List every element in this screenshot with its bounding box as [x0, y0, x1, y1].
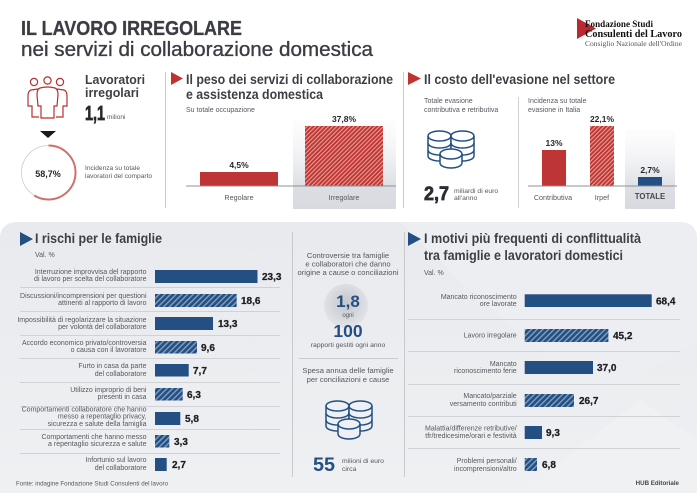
row: discussioni 18,6: 18,6 [241, 296, 261, 307]
text: spesa annua [302, 366, 394, 384]
row: comportamenti collaboratore 5,8: 5,8 [185, 414, 199, 425]
number: 1,1 milioni: 1,1 [85, 103, 105, 125]
row: comportamenti collaboratore 5,8: Comportamenti collaboratore che hanno [22, 406, 147, 414]
stat circle: 1,8 ogni 100: 1,8 [336, 292, 360, 311]
row: mancato riconoscimento ferie 37,0: riconoscimento ferie [454, 368, 517, 375]
row: accordo 9,6: Accordo economico privato/controversia [22, 340, 147, 347]
panel: controversie e spesa [298, 251, 399, 476]
text: spesa annua: per conciliazioni e cause [307, 375, 389, 384]
row: accordo 9,6 [22, 340, 215, 354]
row: comportamenti 3,3 [41, 434, 188, 448]
row: utilizzo 6,3: 6,3 [187, 390, 201, 401]
row: infortunio 2,7: 2,7 [172, 460, 186, 471]
text: totale evasione [424, 98, 498, 114]
highlight: irregolare column [293, 120, 396, 209]
row: interruzione 23,3: di lavoro per scelta del collaboratore [34, 276, 147, 283]
heading: lavoratori irregolari: Lavoratori [85, 73, 145, 87]
heading: il peso dei servizi [186, 71, 393, 102]
unit label: Val. % [35, 252, 55, 259]
row: problemi personali 6,8 [454, 458, 556, 473]
row: malattia 9,3: tfr/tredicesime/orari e festività [425, 433, 517, 440]
heading: i motivi [424, 230, 641, 263]
text: incidenza [85, 165, 152, 180]
row: infortunio 2,7: del collaboratore [95, 465, 147, 472]
highlight: totale column [625, 130, 675, 209]
logo: Fondazione Studi: Consulenti del Lavoro [585, 29, 682, 40]
row: impossibilità 13,3: per volontà del collaboratore [58, 324, 147, 331]
row: accordo 9,6: 9,6 [201, 343, 215, 354]
row: discussioni 18,6 [20, 293, 261, 307]
row: furto 7,7 [78, 363, 207, 378]
number: 1,1 milioni: milioni [107, 114, 125, 121]
source note: Fonte: indagine Fondazione Studi Consulenti del lavoro [16, 480, 169, 488]
row: utilizzo 6,3: presenti in casa [97, 394, 147, 401]
heading: i rischi: I rischi per le famiglie [35, 230, 162, 246]
number: 55 milioni: circa [342, 466, 357, 473]
row: infortunio 2,7: Infortunio sul lavoro [85, 457, 147, 464]
bar: regolare: Regolare [224, 193, 254, 202]
unit label: Val. % [424, 270, 444, 277]
text: incidenza su totale evasione: evasione in Italia [528, 107, 580, 114]
row: discussioni 18,6: Discussioni/incomprensioni per questioni [20, 293, 147, 300]
icon: database coins [428, 131, 474, 168]
bar: irregolare [305, 114, 383, 202]
stat circle: 1,8 ogni 100 [311, 284, 385, 349]
icon: blue arrow [20, 232, 33, 246]
row: impossibilità 13,3 [17, 317, 238, 331]
text: incidenza: lavoratori del comparto [85, 173, 152, 180]
heading: il peso dei servizi: e assistenza domestica [186, 86, 323, 102]
row: malattia 9,3: Malattia/differenze retributive/ [425, 426, 517, 432]
row: mancato riconoscimento ore 68,4: 68,4 [656, 296, 676, 308]
stat circle: 1,8 ogni 100: 100 [333, 321, 363, 341]
text: totale evasione: contributiva e retributiva [424, 107, 498, 114]
panel: lavoratori irregolari [22, 73, 152, 200]
text: totale evasione: Totale evasione [424, 98, 473, 105]
row: comportamenti 3,3: a repentaglio sicurezza e salute [48, 441, 147, 448]
bar: irpef [590, 114, 614, 202]
row: utilizzo 6,3 [70, 387, 201, 401]
icon: blue arrow [408, 232, 421, 246]
text: spesa annua: Spesa annua delle famiglie [302, 366, 394, 375]
text: controversie [298, 251, 399, 277]
row: problemi personali 6,8: Problemi personali/ [457, 458, 517, 465]
row: accordo 9,6: o causa con il lavoratore [71, 347, 147, 354]
row: problemi personali 6,8: incomprensioni/altro [454, 466, 517, 473]
row: problemi personali 6,8: 6,8 [542, 460, 556, 471]
bar: contributiva: 13% [545, 138, 563, 148]
row: impossibilità 13,3: Impossibilità di regolarizzare la situazione [17, 317, 147, 324]
row: furto 7,7: Furto in casa da parte [78, 363, 147, 370]
row: mancato riconoscimento ore 68,4: Mancato riconoscimento [441, 294, 517, 301]
bar: contributiva: Contributiva [534, 193, 572, 202]
title: nei servizi di collaborazione domestica [21, 39, 374, 61]
row: utilizzo 6,3: Utilizzo improprio di beni [70, 387, 147, 394]
row: discussioni 18,6: attinenti al rapporto di lavoro [58, 300, 147, 307]
panel: il costo dell'evasione [408, 71, 677, 209]
text: incidenza su totale evasione [528, 98, 586, 114]
number: 55 milioni: 55 [313, 455, 335, 476]
row: mancato riconoscimento ferie 37,0: Mancato [490, 361, 517, 368]
icon: three workers [28, 77, 67, 118]
text: controversie: e collaboratori che danno [305, 260, 391, 268]
row: infortunio 2,7 [85, 457, 186, 472]
row: comportamenti 3,3: Comportamenti che hanno messo [41, 434, 147, 441]
stat circle: 1,8 ogni 100: ogni [342, 313, 354, 319]
text: controversie: Controversie tra famiglie [307, 251, 389, 260]
bar: totale [635, 165, 665, 201]
bar: irregolare: Irregolare [329, 193, 359, 202]
row: lavoro irregolare 45,2 [464, 329, 633, 342]
row: furto 7,7: del collaboratore [95, 371, 147, 378]
number: 2,7 miliardi: all'anno [454, 195, 477, 202]
logo: Fondazione Studi [577, 18, 683, 48]
row: mancato riconoscimento ferie 37,0: 37,0 [597, 363, 617, 374]
icon: database coins [326, 401, 372, 439]
panel: i motivi di conflittualità [408, 230, 680, 487]
panel: i rischi per le famiglie [16, 230, 282, 488]
row: versamento contributi 26,7 [450, 393, 599, 408]
text: controversie: origine a cause o conciliazioni [298, 268, 399, 277]
row: comportamenti collaboratore 5,8: sicurezza e salute della famiglia [48, 421, 147, 428]
number: 2,7 miliardi: 2,7 [424, 184, 449, 205]
icon: arrow down [40, 131, 56, 138]
heading: lavoratori irregolari: irregolari [85, 86, 139, 100]
row: lavoro irregolare 45,2: 45,2 [613, 331, 633, 342]
heading: lavoratori irregolari [85, 73, 145, 100]
row: malattia 9,3 [425, 426, 560, 440]
logo: Fondazione Studi: Consiglio Nazionale dell'Ordine [585, 39, 683, 48]
row: comportamenti collaboratore 5,8: messo a repentaglio privacy, [58, 414, 147, 420]
credit: HUB Editoriale [636, 480, 680, 487]
donut chart: 58,7%: 58,7% [35, 169, 61, 179]
number: 2,7 miliardi: miliardi di euro [454, 188, 498, 195]
row: malattia 9,3: 9,3 [546, 428, 560, 439]
number: 55 milioni: milioni di euro [342, 458, 384, 465]
heading: i motivi: tra famiglie e lavoratori domestici [424, 247, 623, 263]
icon: red arrow [408, 72, 421, 85]
row: comportamenti collaboratore 5,8 [22, 406, 199, 428]
bar: regolare: 4,5% [229, 160, 249, 170]
row: furto 7,7: 7,7 [193, 366, 207, 377]
number: 55 milioni [313, 455, 384, 476]
title: IL LAVORO IRREGOLARE [21, 18, 242, 40]
title [21, 18, 374, 61]
row: impossibilità 13,3: 13,3 [218, 319, 238, 330]
row: versamento contributi 26,7: 26,7 [579, 396, 599, 407]
bar: irregolare: 37,8% [332, 114, 356, 124]
icon: red arrow [171, 72, 183, 85]
row: interruzione 23,3 [34, 269, 282, 283]
row: versamento contributi 26,7: versamento contributi [450, 401, 517, 408]
heading: i motivi: I motivi più frequenti di conflittualità [424, 230, 641, 246]
row: interruzione 23,3: 23,3 [262, 272, 282, 283]
heading: il costo dell'evasione: Il costo dell'evasione nel settore [424, 71, 615, 87]
text: incidenza: Incidenza su totale [85, 165, 140, 172]
bar: contributiva [534, 138, 572, 202]
number: 1,1 milioni [85, 103, 125, 125]
bar: irpef: Irpef [595, 193, 609, 202]
heading: il peso dei servizi: Il peso dei servizi di collaborazione [186, 71, 393, 87]
bar: regolare [200, 160, 278, 202]
bar: totale: 2,7% [640, 165, 660, 175]
number: 2,7 miliardi [424, 184, 498, 205]
panel: il peso dei servizi [171, 71, 396, 209]
row: comportamenti 3,3: 3,3 [174, 437, 188, 448]
row: lavoro irregolare 45,2: Lavoro irregolare [464, 332, 517, 340]
lower background panel [0, 222, 697, 493]
row: mancato riconoscimento ferie 37,0 [454, 361, 617, 375]
text: incidenza su totale evasione: Incidenza su totale [528, 98, 586, 105]
bar: totale: TOTALE [635, 192, 665, 201]
logo: Fondazione Studi: Fondazione Studi [585, 19, 653, 29]
subtitle: Su totale occupazione [186, 107, 255, 114]
row: mancato riconoscimento ore 68,4 [441, 294, 676, 308]
row: mancato riconoscimento ore 68,4: ore lavorate [480, 301, 517, 308]
row: interruzione 23,3: Interruzione improvvisa del rapporto [35, 269, 147, 276]
stat circle: 1,8 ogni 100: rapporti gestiti ogni anno [311, 342, 385, 349]
bar: irpef: 22,1% [590, 114, 614, 124]
row: versamento contributi 26,7: Mancato/parziale [463, 393, 517, 400]
